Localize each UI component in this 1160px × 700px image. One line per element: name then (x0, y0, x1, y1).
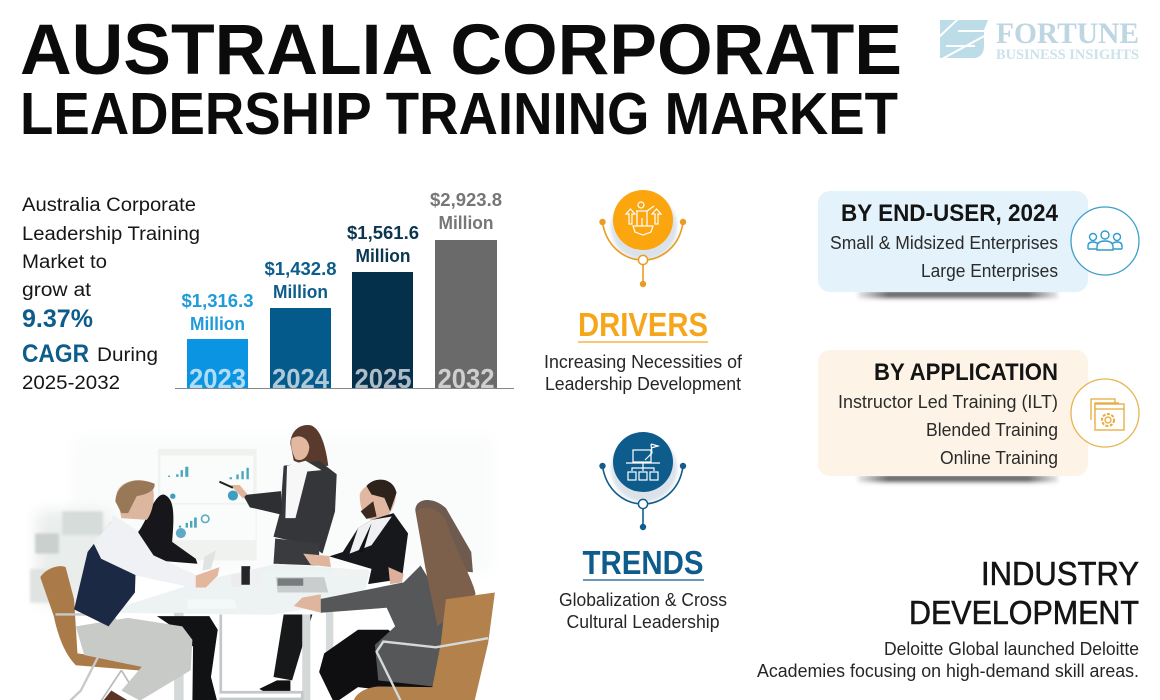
icon: people group (1071, 207, 1139, 275)
room background (30, 437, 493, 603)
bar 2023: Million (190, 314, 245, 334)
panel: by application (818, 350, 1139, 482)
heading: industry development (909, 555, 1139, 631)
text: trends description (559, 590, 727, 632)
text block: CAGR statement: 2025-2032 (22, 373, 120, 394)
seated woman behind (415, 500, 473, 572)
right chair (353, 593, 495, 700)
text block: CAGR statement: 9.37% (22, 305, 93, 333)
left chair (40, 566, 150, 700)
panel: by application: BY APPLICATION (874, 359, 1058, 386)
bar 2032: $2,923.8 (430, 190, 502, 210)
icon: settings windows (1071, 379, 1139, 447)
woman in black, left (137, 494, 197, 564)
heading: trends: TRENDS (582, 544, 704, 581)
man in vest (74, 480, 219, 700)
title: LEADERSHIP TRAINING MARKET (20, 81, 898, 147)
panel: by application: Blended Training (926, 420, 1058, 440)
text block: CAGR statement: Australia Corporate (22, 195, 196, 216)
bar chart (175, 190, 514, 394)
text block: CAGR statement: grow at (22, 280, 92, 301)
logo: Fortune Business Insights: BUSINESS INSIGHTS (996, 47, 1139, 63)
text: trends description: Cultural Leadership (566, 612, 720, 632)
panel: by end-user (818, 191, 1139, 298)
panel: by end-user: Small & Midsized Enterprises (830, 233, 1058, 253)
bar 2025 (347, 223, 419, 394)
panel: by end-user: Large Enterprises (921, 261, 1058, 281)
bar 2025: $1,561.6 (347, 223, 419, 243)
text: industry development description (757, 639, 1139, 681)
text block: CAGR statement: Market to (22, 252, 107, 273)
title: AUSTRALIA CORPORATE (20, 11, 902, 90)
bar 2024 (264, 259, 336, 394)
seated man with beard (303, 480, 408, 584)
heading: drivers: DRIVERS (578, 306, 708, 343)
bar 2023 (182, 291, 254, 394)
text block: CAGR statement: During (97, 345, 158, 366)
presenter (219, 425, 337, 691)
icon: trends (599, 432, 686, 530)
bar 2024: $1,432.8 (264, 259, 336, 279)
panel: by end-user: BY END-USER, 2024 (841, 200, 1059, 227)
logo: Fortune Business Insights (939, 17, 1139, 63)
woman in foreground (294, 508, 476, 700)
text block: CAGR statement (22, 195, 200, 394)
text: drivers description: Increasing Necessities of (544, 352, 743, 372)
flip chart with graphs (158, 449, 257, 560)
text: trends description: Globalization & Cross (559, 590, 727, 610)
text: drivers description (544, 352, 743, 394)
text block: CAGR statement: CAGR (22, 340, 89, 368)
bar 2032: 2032 (438, 363, 494, 394)
heading: industry development: DEVELOPMENT (909, 594, 1139, 631)
bar 2025: Million (356, 246, 410, 266)
heading: industry development: INDUSTRY (981, 555, 1139, 592)
bar 2032: Million (438, 213, 494, 233)
title (20, 11, 902, 147)
photo: team meeting around glass table (30, 425, 495, 700)
text: industry development description: Academies focusing on high-demand skill areas. (757, 661, 1139, 681)
bar 2023: $1,316.3 (182, 291, 254, 311)
text block: CAGR statement: Leadership Training (22, 224, 200, 245)
bar 2023: 2023 (189, 363, 246, 394)
text: drivers description: Leadership Development (545, 374, 741, 394)
logo: Fortune Business Insights: FORTUNE (996, 17, 1139, 50)
panel: by application: Online Training (940, 448, 1058, 468)
icon: drivers (599, 190, 686, 287)
bar 2024: 2024 (272, 363, 329, 394)
glass table (112, 564, 370, 700)
panel: by application: Instructor Led Training (ILT) (838, 392, 1058, 412)
bar 2025: 2025 (354, 363, 412, 394)
bar 2032 (430, 190, 502, 394)
laptop and cups (231, 566, 368, 593)
text: industry development description: Deloitte Global launched Deloitte (884, 639, 1139, 659)
bar 2024: Million (273, 282, 328, 302)
